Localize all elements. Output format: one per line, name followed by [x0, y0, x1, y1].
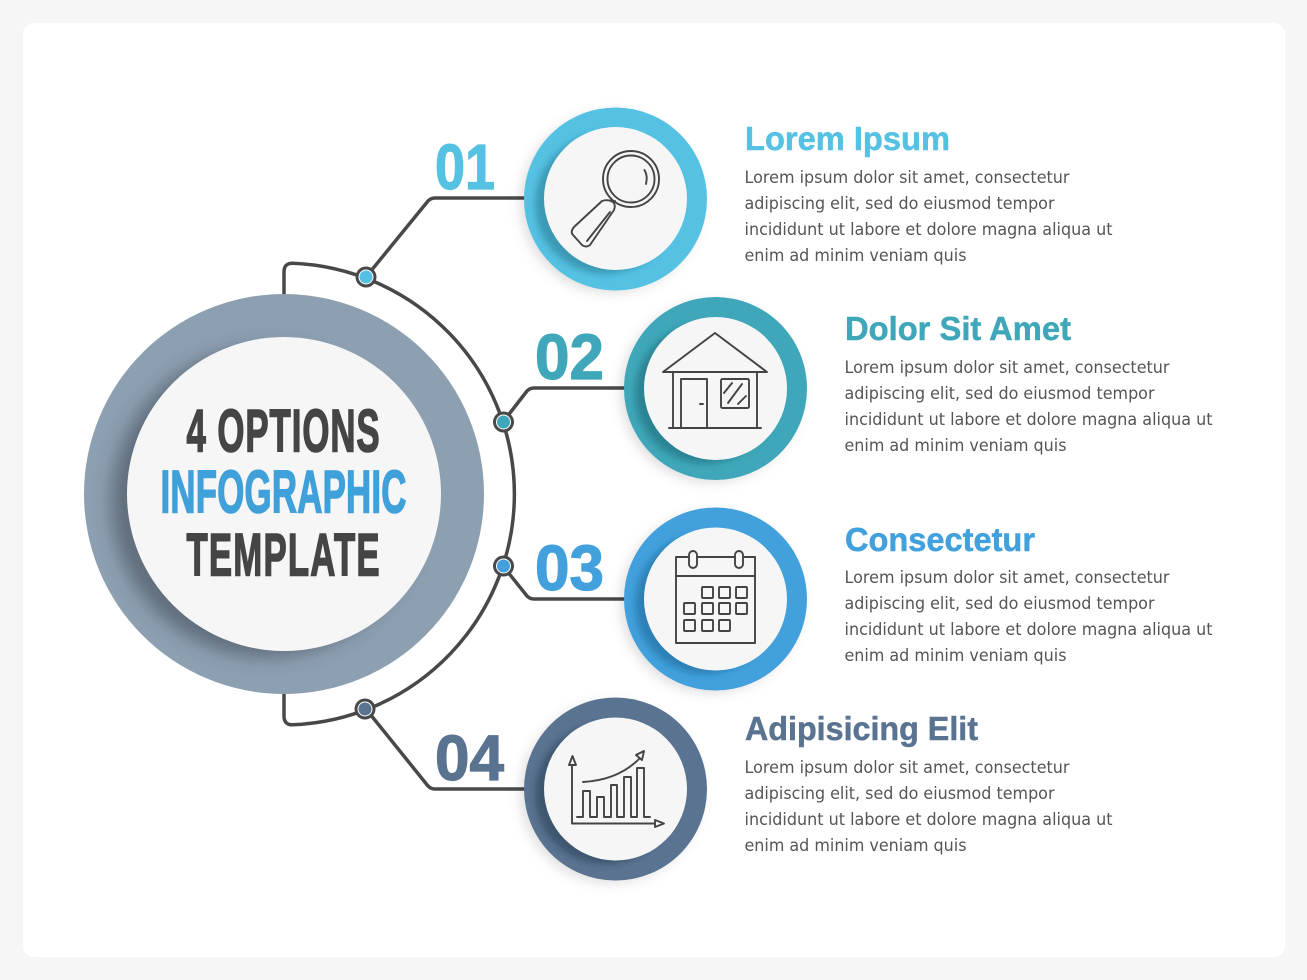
junction dot 02	[493, 412, 514, 432]
text block 01	[744, 120, 1113, 266]
text block 01: adipiscing elit, sed do eiusmod tempor	[744, 194, 1055, 214]
connector line 02	[503, 388, 630, 422]
text block 04: adipiscing elit, sed do eiusmod tempor	[744, 784, 1055, 804]
text block 02: adipiscing elit, sed do eiusmod tempor	[844, 384, 1155, 404]
text block 02	[844, 310, 1213, 456]
junction dot 01	[356, 266, 376, 288]
text block 03: incididunt ut labore et dolore magna aliqua ut	[844, 620, 1213, 640]
central title: 4 OPTIONS	[186, 399, 380, 465]
text block 01: incididunt ut labore et dolore magna aliqua ut	[744, 220, 1113, 240]
text block 03: Consectetur	[845, 521, 1035, 558]
text block 02: Dolor Sit Amet	[845, 310, 1071, 347]
text block 01: Lorem ipsum dolor sit amet, consectetur	[744, 168, 1070, 188]
central title	[160, 399, 406, 589]
icon: growth chart	[569, 751, 664, 827]
connector line 01	[366, 198, 530, 277]
option 01 circle with magnifier icon	[520, 108, 707, 293]
text block 03: Lorem ipsum dolor sit amet, consectetur	[844, 568, 1170, 588]
number 02: 02	[535, 321, 604, 393]
text block 04	[744, 710, 1113, 856]
number 03: 03	[535, 532, 604, 604]
option 02 circle with house icon	[620, 297, 807, 482]
option 03 circle with calendar icon	[620, 508, 807, 693]
junction dot 03	[493, 556, 514, 576]
text block 04: Lorem ipsum dolor sit amet, consectetur	[744, 758, 1070, 778]
option 04 circle with chart icon	[520, 698, 707, 883]
icon: house	[663, 333, 767, 428]
text block 04: enim ad minim veniam quis	[744, 836, 967, 856]
number 04: 04	[435, 722, 504, 794]
text block 02: Lorem ipsum dolor sit amet, consectetur	[844, 358, 1170, 378]
text block 02: enim ad minim veniam quis	[844, 436, 1067, 456]
central circle	[84, 294, 484, 694]
text block 02: incididunt ut labore et dolore magna aliqua ut	[844, 410, 1213, 430]
icon: magnifier	[572, 151, 659, 246]
junction dot 04	[354, 698, 376, 720]
text block 03	[844, 521, 1213, 666]
text block 04: Adipisicing Elit	[745, 710, 978, 747]
connector line 04	[366, 709, 530, 789]
connector line 03	[503, 566, 630, 599]
text block 03: enim ad minim veniam quis	[844, 646, 1067, 666]
connector arc around central circle	[284, 263, 514, 725]
text block 04: incididunt ut labore et dolore magna aliqua ut	[744, 810, 1113, 830]
text block 01: Lorem Ipsum	[745, 120, 950, 157]
central title: TEMPLATE	[186, 523, 380, 589]
text block 03: adipiscing elit, sed do eiusmod tempor	[844, 594, 1155, 614]
text block 01: enim ad minim veniam quis	[744, 246, 967, 266]
number 01: 01	[435, 131, 495, 203]
central title: INFOGRAPHIC	[160, 460, 406, 526]
icon: calendar	[676, 551, 755, 643]
